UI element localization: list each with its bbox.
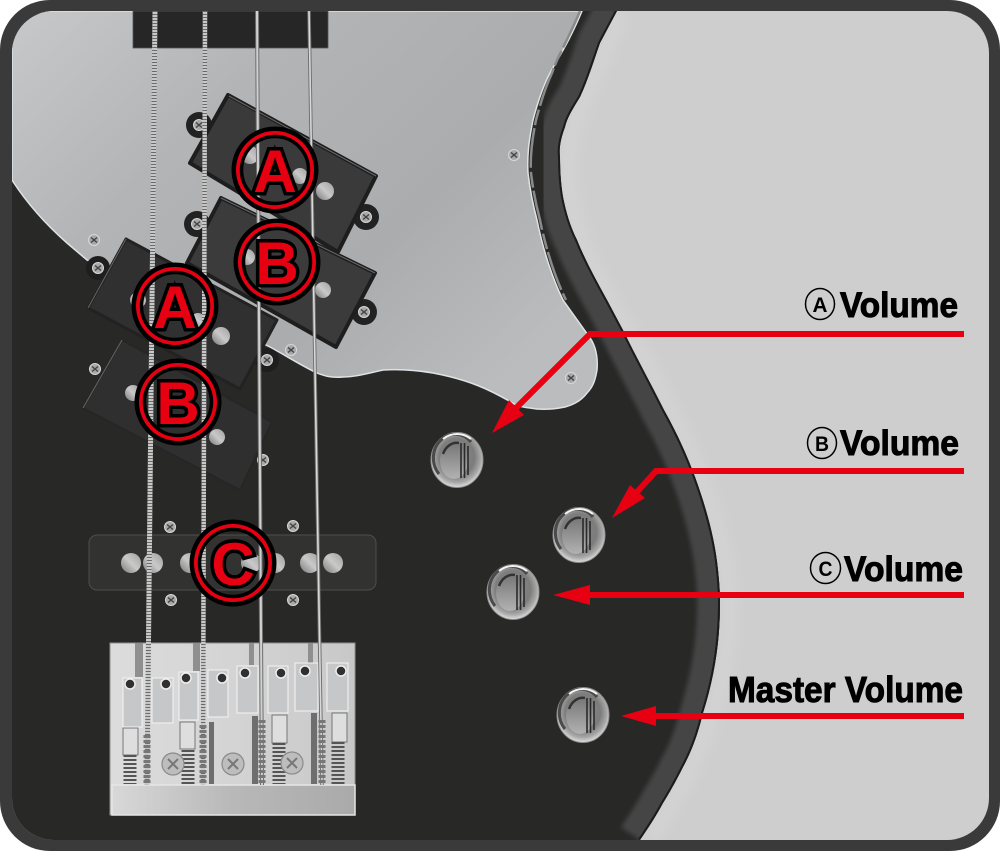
badge A lower: A xyxy=(153,274,197,341)
pickguard edge: chrome binding xyxy=(531,11,580,300)
arrow: master volume xyxy=(621,706,964,726)
arrow: C volume xyxy=(553,585,964,605)
strings xyxy=(147,11,322,785)
knob: C volume xyxy=(487,564,539,620)
body edge: lighter bevel xyxy=(560,11,720,840)
guitar body xyxy=(12,11,720,840)
badge C xyxy=(192,522,274,604)
label: C volume: Volume xyxy=(844,550,963,589)
knob: master volume xyxy=(557,688,609,742)
bridge xyxy=(110,643,355,815)
label: B volume: B xyxy=(815,433,829,456)
nut xyxy=(133,11,328,48)
pickguard screws xyxy=(88,150,576,384)
badge B lower: B xyxy=(156,370,200,437)
badge A lower xyxy=(134,265,216,347)
body soft glow xyxy=(568,11,730,840)
label: A volume: A xyxy=(812,294,828,317)
pickup mount screw xyxy=(286,344,296,356)
badge C: C xyxy=(211,531,255,598)
pickup: upper A xyxy=(186,95,379,252)
label: C volume: C xyxy=(818,558,832,581)
badge B upper: B xyxy=(255,230,299,297)
knob: A volume xyxy=(431,432,483,488)
badge B lower xyxy=(137,361,219,443)
pickguard xyxy=(12,11,597,409)
arrow: B volume xyxy=(612,471,964,518)
pickup: lower B xyxy=(82,340,269,466)
pickup: upper B xyxy=(184,198,377,347)
pickup: jazz C xyxy=(89,520,376,606)
label: master volume: Master Volume xyxy=(728,669,963,710)
arrow: A volume xyxy=(492,334,964,433)
pickup: lower A xyxy=(86,239,279,389)
label: B volume: Volume xyxy=(840,424,959,463)
knob: B volume xyxy=(553,508,605,562)
badge B upper xyxy=(236,221,318,303)
badge A upper xyxy=(234,129,316,211)
badge A upper: A xyxy=(253,138,297,205)
label: A volume: Volume xyxy=(840,286,958,325)
